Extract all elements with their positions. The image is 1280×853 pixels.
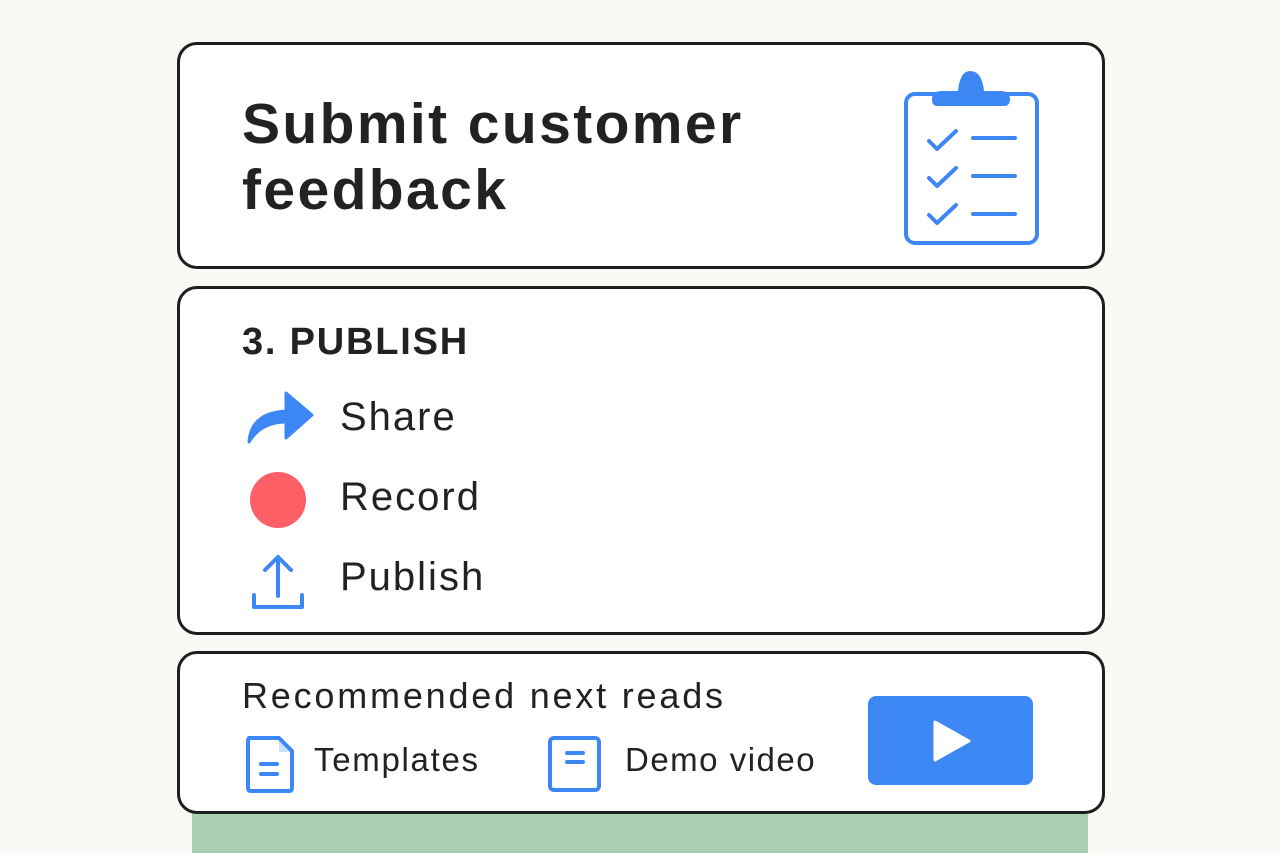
title xyxy=(242,92,744,222)
label: Demo video xyxy=(625,741,816,778)
panel: title card xyxy=(177,42,1105,269)
icon: document xyxy=(246,736,294,793)
icon: play xyxy=(934,720,971,762)
panel: publish steps xyxy=(177,286,1105,635)
title: Submit customer xyxy=(242,92,744,156)
green footer strip xyxy=(192,812,1088,853)
icon: red dot xyxy=(250,472,306,528)
icon: clipboard xyxy=(904,71,1039,245)
label: Publish xyxy=(340,555,485,599)
button: play video xyxy=(868,696,1033,785)
icon: share arrow xyxy=(248,392,314,444)
label: Templates xyxy=(314,741,480,778)
title: feedback xyxy=(242,158,508,222)
icon: document xyxy=(548,736,601,792)
icon: upload xyxy=(252,554,304,609)
item: record xyxy=(250,472,481,528)
heading: Recommended next reads xyxy=(242,675,726,716)
heading: 3. PUBLISH xyxy=(242,321,469,363)
item: publish xyxy=(252,554,485,609)
item: share xyxy=(248,392,457,444)
panel: recommended next reads xyxy=(177,651,1105,814)
label: Share xyxy=(340,395,457,439)
link: templates xyxy=(246,736,480,793)
label: Record xyxy=(340,475,481,519)
link: demo video xyxy=(548,736,816,792)
